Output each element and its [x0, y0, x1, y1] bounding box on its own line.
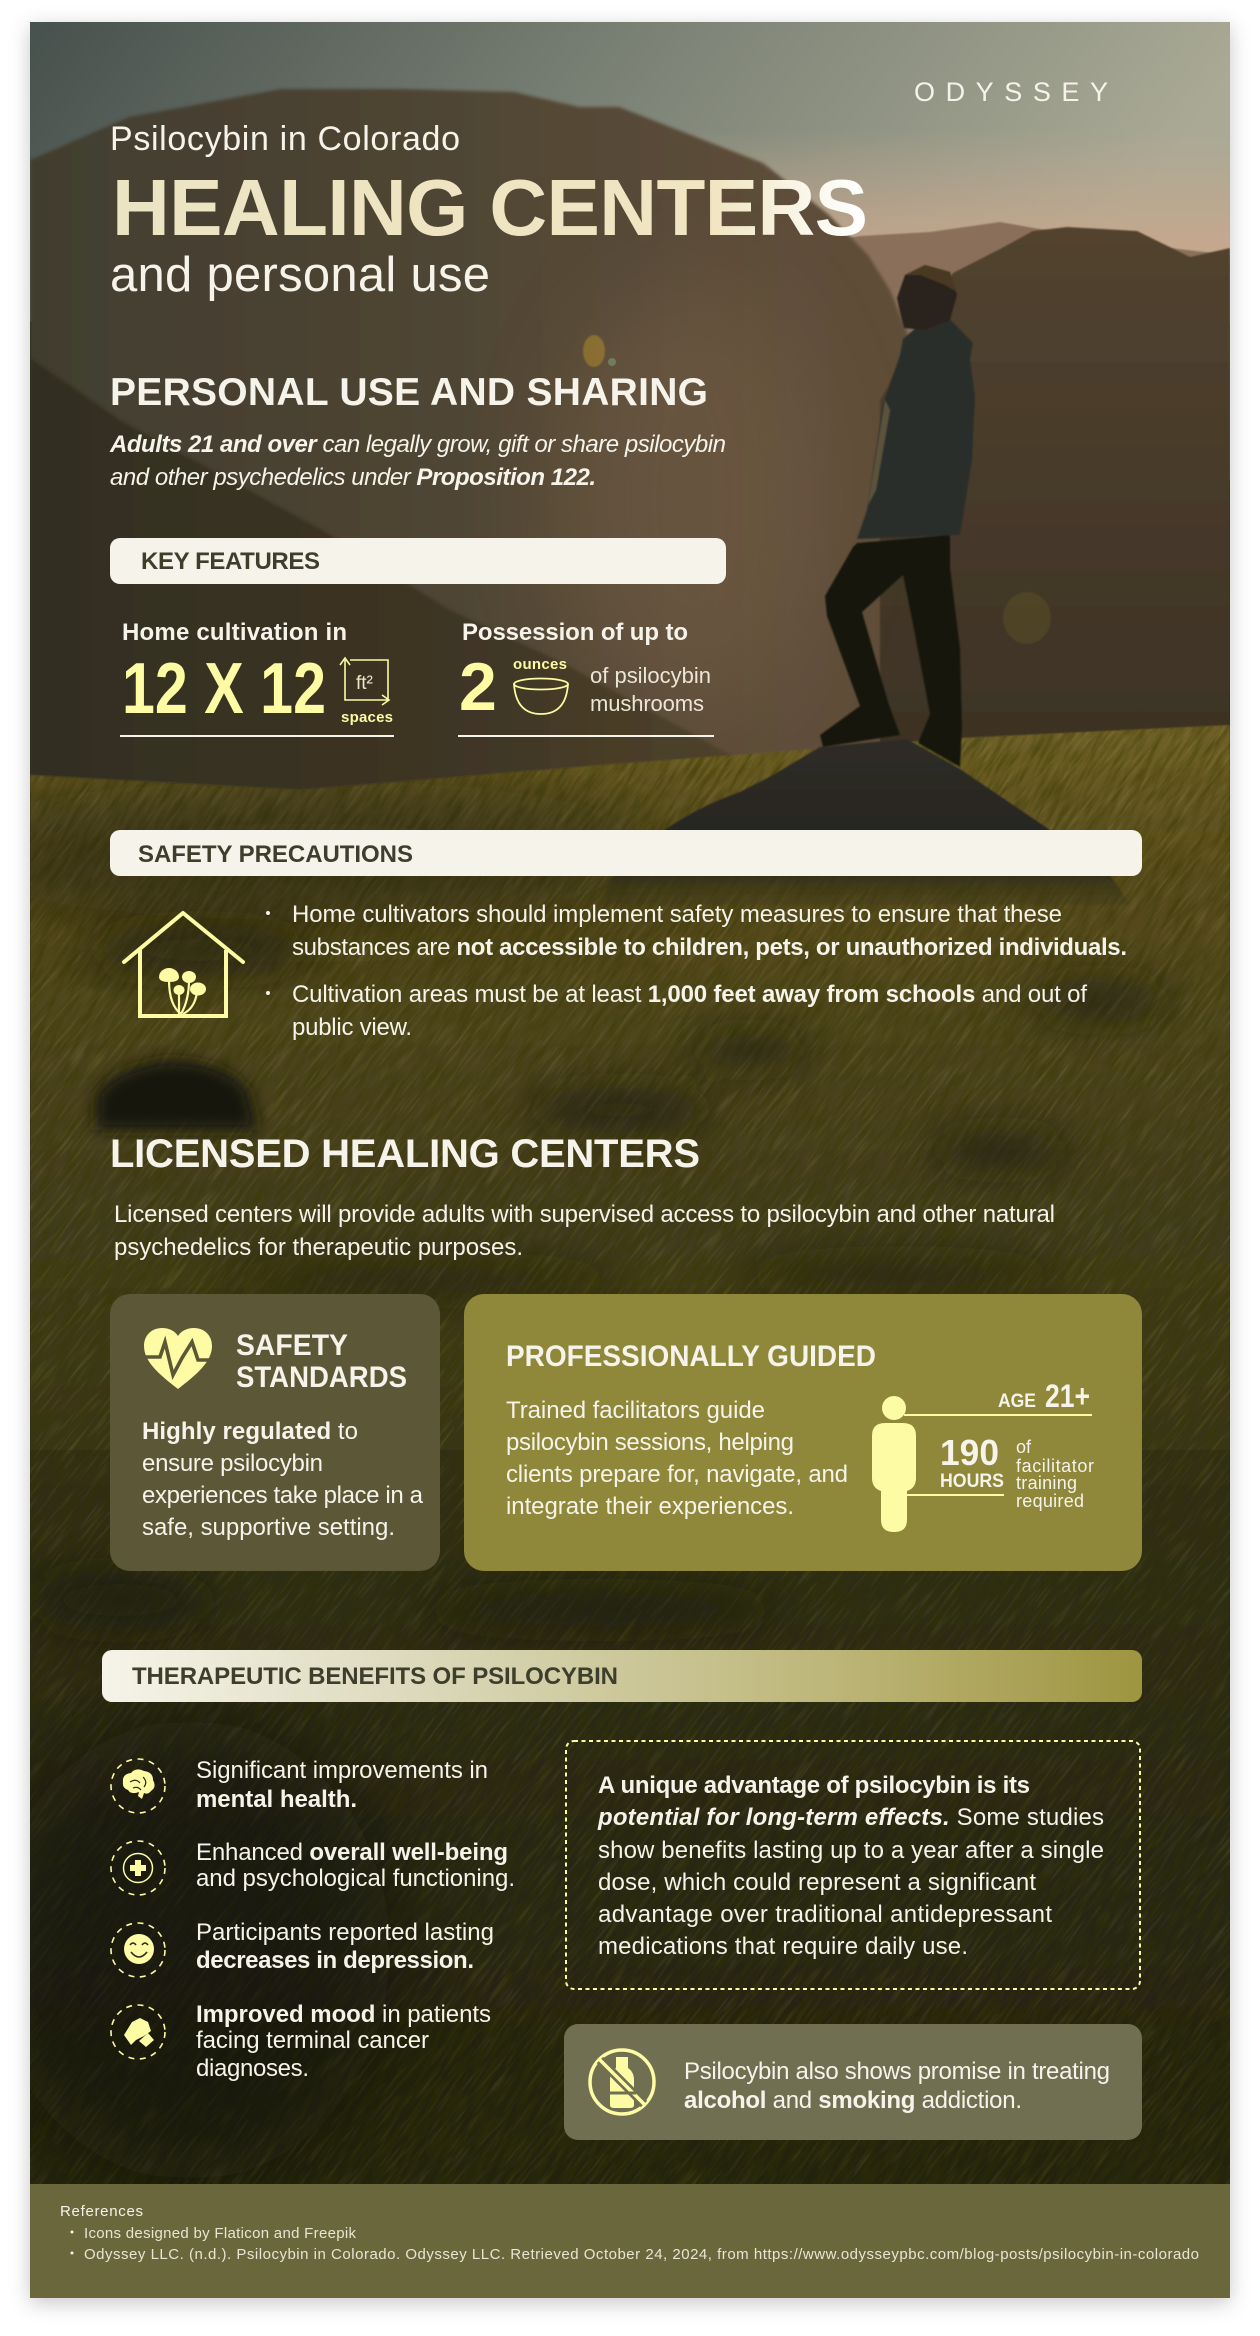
callout: long-term effects: A unique advantage of psilocybin is its [598, 1772, 1030, 1799]
chart: facilitator person figure: 190 [940, 1432, 999, 1473]
icon: bowl [514, 678, 568, 714]
text block: licensed centers intro [114, 1201, 1055, 1261]
label bar: therapeutic benefits: THERAPEUTIC BENEFITS OF PSILOCYBIN [132, 1663, 618, 1690]
benefit: mood: Improved mood in patients [196, 2001, 491, 2028]
icon: medical cross [124, 1854, 152, 1882]
list: safety bullets [266, 901, 1127, 1041]
label bar: safety precautions [110, 830, 1142, 876]
logo: ODYSSEY: ODYSSEY [914, 77, 1108, 107]
text block: personal use intro [109, 431, 726, 491]
icon: square feet [340, 658, 389, 705]
title block [110, 120, 868, 302]
label bar: safety precautions: SAFETY PRECAUTIONS [138, 841, 413, 868]
label bar: therapeutic benefits [102, 1650, 1142, 1702]
chart: facilitator person figure: AGE [998, 1391, 1036, 1412]
heading: personal use and sharing: PERSONAL USE AND SHARING [110, 371, 708, 414]
callout: long-term effects: show benefits lasting up to a year after a single [598, 1837, 1104, 1864]
chart: facilitator person figure: 21+ [1045, 1378, 1090, 1414]
footer: references: Icons designed by Flaticon and Freepik [84, 2225, 356, 2242]
panel: safety standards [110, 1294, 440, 1571]
label bar: key features [110, 538, 726, 584]
text block: personal use intro: and other psychedelics under Proposition 122. [110, 464, 596, 491]
benefit: mental health [111, 1757, 488, 1813]
footer: references: Odyssey LLC. (n.d.). Psilocybin in Colorado. Odyssey LLC. Retrieved October 24, 2024, from https://www.odysseypbc.com/blog-posts/psilocybin-in-colorado [84, 2246, 1199, 2263]
panel: safety standards: STANDARDS [236, 1361, 407, 1394]
callout: long-term effects: potential for long-term effects. Some studies [597, 1804, 1104, 1831]
stat: possession limit [458, 619, 714, 737]
text block: licensed centers intro: Licensed centers will provide adults with supervised access to psilocybin and other natural [114, 1201, 1055, 1228]
callout: addiction: alcohol and smoking addiction. [684, 2087, 1022, 2114]
panel: professionally guided: psilocybin sessions, helping [506, 1429, 794, 1456]
icon: house with mushrooms [124, 913, 243, 1016]
chart: facilitator person figure: required [1016, 1491, 1084, 1511]
stat: home cultivation: Home cultivation in [122, 619, 347, 646]
benefit: mood [111, 2001, 491, 2082]
stat: possession limit: ounces [513, 656, 567, 673]
stat: possession limit: Possession of up to [462, 619, 688, 646]
panel: professionally guided: integrate their experiences. [506, 1493, 794, 1520]
footer: references [30, 2184, 1230, 2298]
benefit: mood: facing terminal cancer [196, 2027, 429, 2054]
footer: references: References [60, 2203, 143, 2220]
panel: safety standards: ensure psilocybin [142, 1450, 323, 1477]
list: safety bullets: substances are not accessible to children, pets, or unauthorized individuals. [292, 934, 1127, 961]
benefit: depression: Participants reported lasting [196, 1919, 494, 1946]
heading: licensed healing centers: LICENSED HEALING CENTERS [110, 1132, 700, 1176]
callout: long-term effects: medications that require daily use. [598, 1933, 968, 1960]
benefit: mental health: Significant improvements in [196, 1757, 488, 1784]
callout: addiction: Psilocybin also shows promise in treating [684, 2058, 1110, 2085]
list: benefits [111, 1757, 515, 2082]
icon: brain [123, 1769, 155, 1799]
icon: heart with pulse [142, 1328, 214, 1389]
chart: facilitator person figure: HOURS [940, 1471, 1004, 1492]
panel: safety standards: Highly regulated to [142, 1418, 358, 1445]
icon: square feet: ft² [356, 673, 373, 694]
panel: professionally guided: Trained facilitators guide [506, 1397, 765, 1424]
panel: safety standards: safe, supportive setting. [142, 1514, 395, 1541]
label bar: key features: KEY FEATURES [141, 548, 320, 575]
chart: facilitator person figure [872, 1378, 1094, 1532]
benefit: mood: diagnoses. [196, 2055, 309, 2082]
chart: facilitator person figure: facilitator [1016, 1456, 1094, 1476]
benefit: depression [111, 1919, 494, 1977]
text block: personal use intro: Adults 21 and over can legally grow, gift or share psilocybin [109, 431, 726, 458]
benefit: well-being [111, 1839, 515, 1895]
stat: home cultivation: 12 X 12 [122, 649, 326, 729]
panel: professionally guided: PROFESSIONALLY GUIDED [506, 1340, 876, 1373]
panel: professionally guided [464, 1294, 1142, 1571]
chart: facilitator person figure: of [1016, 1437, 1032, 1457]
chart: facilitator person figure: training [1016, 1473, 1077, 1493]
benefit: depression: decreases in depression. [196, 1947, 474, 1974]
text block: licensed centers intro: psychedelics for therapeutic purposes. [114, 1234, 523, 1261]
benefit: well-being: Enhanced overall well-being [196, 1839, 508, 1866]
man silhouette [820, 265, 975, 767]
stat: possession limit: 2 [459, 649, 497, 725]
callout: long-term effects: advantage over traditional antidepressant [598, 1901, 1052, 1928]
benefit: well-being: and psychological functioning. [196, 1865, 515, 1892]
callout: addiction [564, 2024, 1142, 2140]
list: safety bullets: Cultivation areas must be at least 1,000 feet away from schools and out of [292, 981, 1087, 1008]
title block: Psilocybin in Colorado [110, 120, 460, 158]
stat: home cultivation: spaces [341, 709, 393, 726]
panel: professionally guided: clients prepare for, navigate, and [506, 1461, 848, 1488]
grass shadows [30, 924, 1170, 1630]
list: safety bullets: Home cultivators should implement safety measures to ensure that these [292, 901, 1062, 928]
benefit: mental health: mental health. [196, 1786, 357, 1813]
stat: possession limit: of psilocybin [590, 663, 711, 688]
icon: no bottle [590, 2050, 654, 2114]
callout: long-term effects: dose, which could represent a significant [598, 1869, 1036, 1896]
title block: HEALING CENTERS [112, 163, 868, 252]
stat: possession limit: mushrooms [590, 691, 704, 716]
panel: safety standards: experiences take place in a [142, 1482, 424, 1509]
callout: long-term effects [566, 1741, 1140, 1989]
icon: smiley [124, 1934, 154, 1964]
list: safety bullets: public view. [292, 1014, 412, 1041]
title block: and personal use [110, 248, 490, 302]
stat: home cultivation [120, 619, 394, 737]
panel: safety standards: SAFETY [236, 1329, 348, 1362]
icon: clasped hands [124, 2018, 154, 2047]
